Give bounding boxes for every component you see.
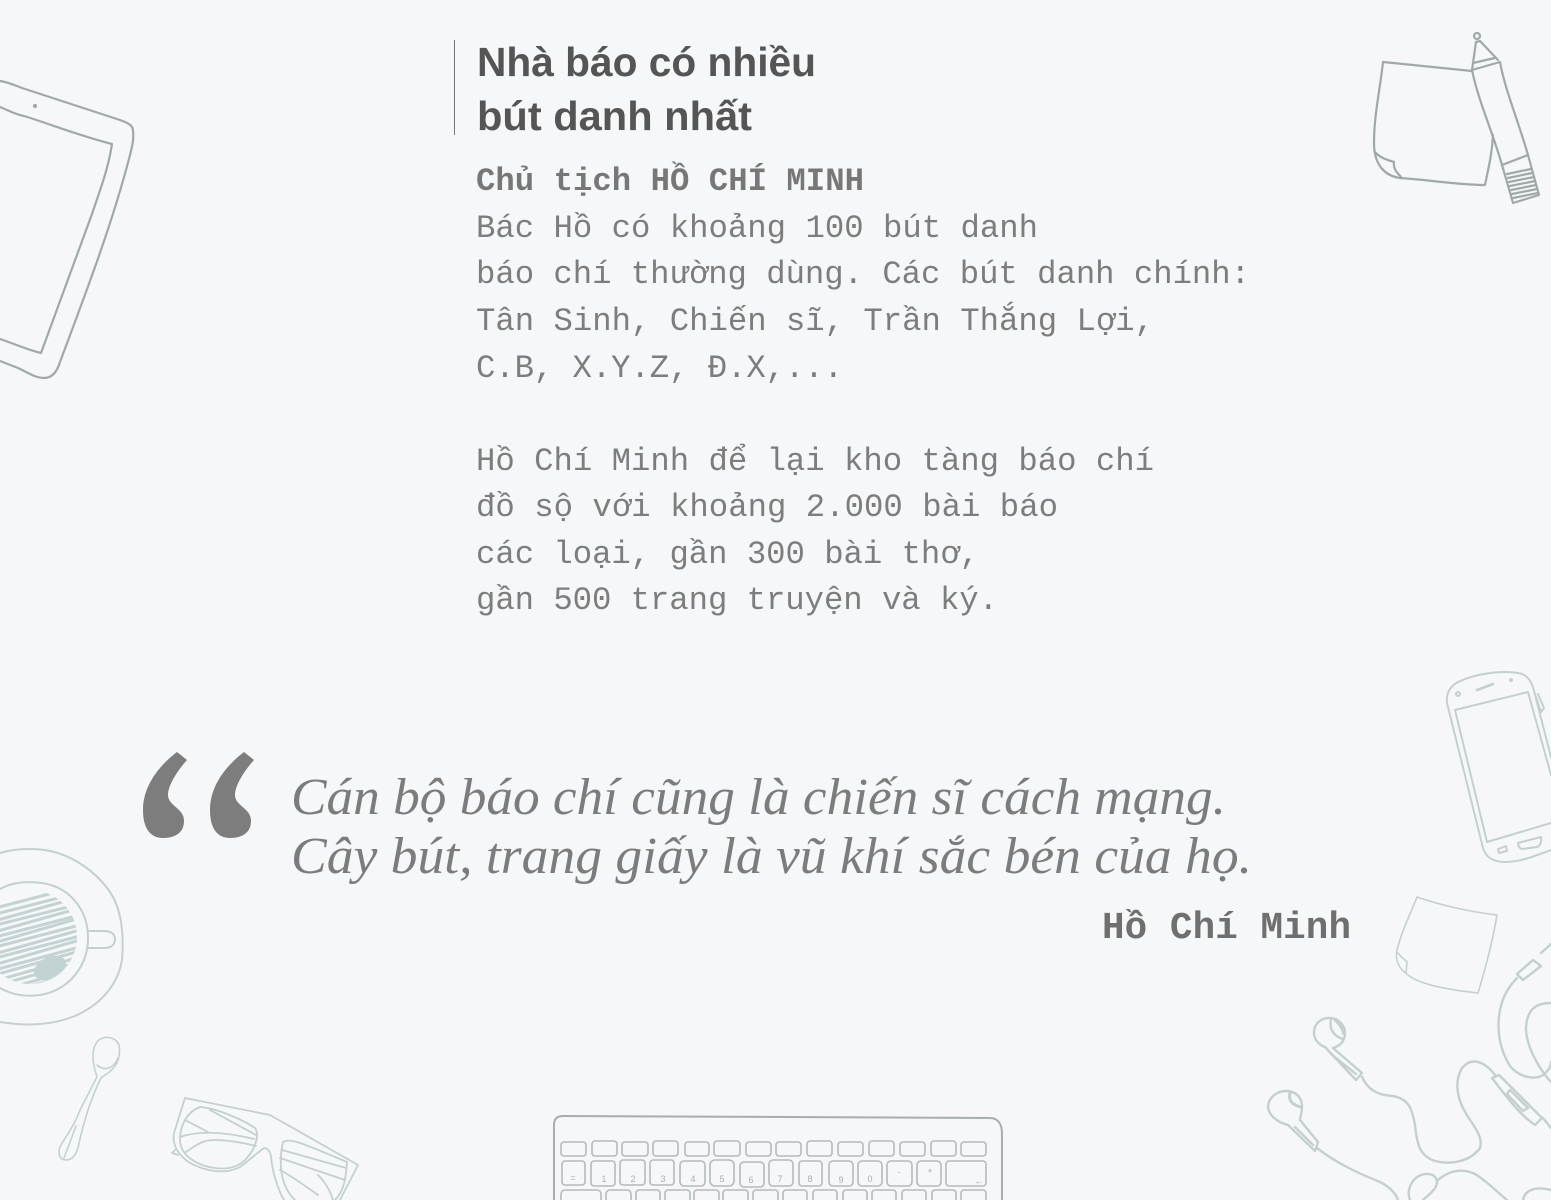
text block: biography: Bác Hồ có khoảng 100 bút danh (476, 210, 1038, 247)
keyboard key labels: 7 (777, 1174, 783, 1184)
keyboard letter row (561, 1190, 986, 1200)
quote text (291, 769, 1252, 885)
icon: keyboard (554, 1116, 1002, 1200)
keyboard key labels: 4 (690, 1174, 696, 1184)
keyboard function row (561, 1141, 986, 1156)
icon: earphones and cable (1268, 944, 1551, 1200)
text block: biography: các loại, gần 300 bài thơ, (476, 536, 979, 573)
quote text: Cây bút, trang giấy là vũ khí sắc bén của họ. (291, 828, 1252, 885)
keyboard key labels: 6 (748, 1175, 754, 1185)
keyboard key labels: - (898, 1167, 900, 1177)
heading rule (454, 40, 455, 135)
icon: blank sticky note (1396, 897, 1497, 993)
keyboard key labels (570, 1166, 984, 1186)
text block: biography: C.B, X.Y.Z, Đ.X,... (476, 350, 843, 387)
keyboard key labels: + (927, 1166, 933, 1176)
keyboard number row (562, 1160, 986, 1187)
icon: coffee cup (0, 849, 123, 1024)
keyboard key labels: 9 (838, 1175, 844, 1185)
quote text: Cán bộ báo chí cũng là chiến sĩ cách mạng. (291, 769, 1226, 826)
keyboard key labels: 1 (601, 1174, 607, 1184)
keyboard key labels: 2 (630, 1174, 636, 1184)
text block: biography: báo chí thường dùng. Các bút danh chính: (476, 256, 1250, 293)
keyboard key labels: 0 (867, 1174, 873, 1184)
keyboard key labels: = (570, 1173, 576, 1183)
icon: glasses (172, 1098, 358, 1200)
keyboard key labels: 3 (660, 1174, 666, 1184)
text block: biography: gần 500 trang truyện và ký. (476, 582, 998, 619)
text block: biography: Tân Sinh, Chiến sĩ, Trần Thắng Lợi, (476, 301, 1154, 340)
icon: sticky note and marker pen (1374, 33, 1539, 203)
quote author: Hồ Chí Minh (1102, 908, 1351, 950)
keyboard key labels: 8 (807, 1174, 813, 1184)
title: bút danh nhất (477, 93, 752, 139)
text block: biography (476, 160, 1250, 619)
icon: quotation mark (143, 752, 254, 838)
icon: tablet (0, 81, 133, 378)
text block: biography: Chủ tịch HỒ CHÍ MINH (476, 160, 864, 200)
keyboard key labels: ← (974, 1176, 984, 1186)
icon: smartphone (1447, 672, 1551, 862)
icon: spoon (59, 1037, 120, 1160)
text block: biography: đồ sộ với khoảng 2.000 bài báo (476, 489, 1058, 526)
title: Nhà báo có nhiều (477, 39, 816, 85)
text block: biography: Hồ Chí Minh để lại kho tàng báo chí (476, 442, 1154, 480)
title (477, 39, 816, 139)
keyboard key labels: 5 (719, 1174, 725, 1184)
